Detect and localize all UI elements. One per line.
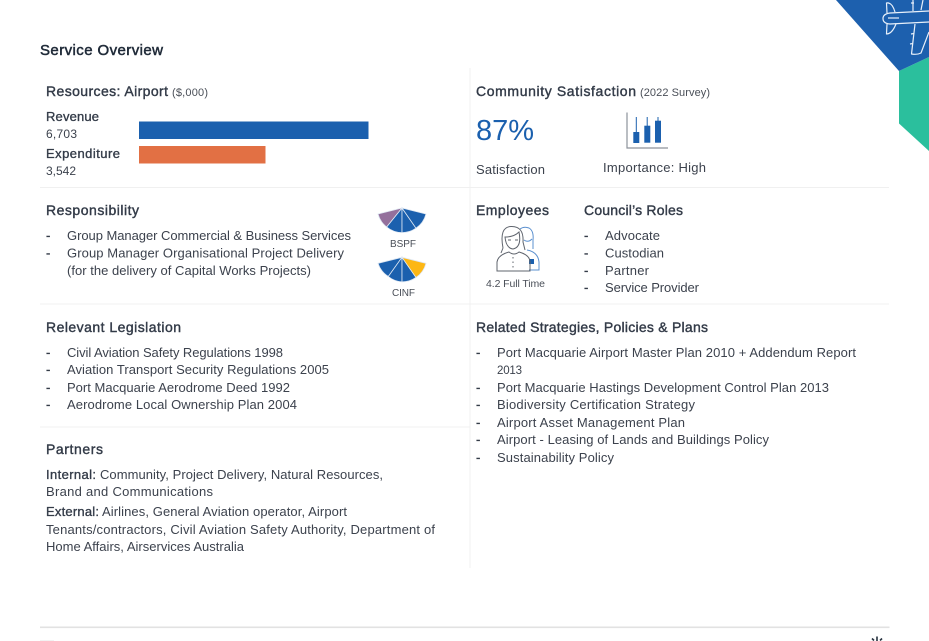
roles list [584,228,700,295]
responsibility list [46,228,352,278]
responsibility list: - [46,228,50,243]
responsibility list: Group Manager Organisational Project Delivery [67,246,344,260]
strategies list: Biodiversity Certification Strategy [497,397,696,412]
BSPF label: BSPF [390,239,416,250]
satisfaction label: Satisfaction [476,162,545,177]
strategies list: Airport - Leasing of Lands and Buildings Policy [497,432,770,447]
external partners [46,504,435,554]
heading: related strategies: Related Strategies, Policies & Plans [476,319,708,335]
strategies list: - [476,450,480,465]
heading: community satisfaction: Community Satisfaction [476,83,636,99]
heading: council's roles: Council’s Roles [584,202,683,218]
heading: relevant legislation: Relevant Legislation [46,319,181,335]
legislation list [46,345,329,412]
survey note: (2022 Survey) [640,87,710,99]
CINF label: CINF [392,288,415,299]
expenditure bar [139,146,266,164]
panel: resources [46,83,368,178]
internal partners: Internal: [46,467,96,482]
legislation list: - [46,345,50,360]
legislation list: Port Macquarie Aerodrome Deed 1992 [67,380,290,395]
legislation list: Aviation Transport Security Regulations 2005 [67,362,329,377]
strategies list: Airport Asset Management Plan [497,415,685,430]
roles list: - [584,280,588,295]
external partners: Tenants/contractors, Civil Aviation Safety Authority, Department of [46,522,435,537]
legislation list: Aerodrome Local Ownership Plan 2004 [67,397,297,412]
strategies list: Sustainability Policy [497,450,614,465]
responsibility list: - [46,246,50,260]
roles list: Service Provider [605,280,700,295]
unit note: ($,000) [172,87,208,99]
panel: relevant legislation [46,319,329,412]
external partners: External: [46,504,99,519]
corner decoration with airplane icon [836,0,929,151]
icon: importance chart [627,112,668,148]
responsibility list: Group Manager Commercial & Business Services [67,228,352,243]
strategies list: - [476,345,480,360]
icon: employees [497,226,539,271]
revenue bar [139,122,368,139]
roles list: - [584,246,588,260]
heading: employees: Employees [476,202,549,218]
heading: partners: Partners [46,441,103,457]
expenditure value: 3,542 [46,164,76,178]
employee count: 4.2 Full Time [486,278,545,290]
legislation list: Civil Aviation Safety Regulations 1998 [67,345,283,360]
icon: CINF fan [378,257,426,282]
responsibility list: (for the delivery of Capital Works Projects) [67,263,311,278]
panel: community satisfaction [476,83,710,177]
panel: employees [476,202,549,290]
internal partners: Community, Project Delivery, Natural Resources, [100,467,383,482]
legislation list: - [46,362,50,377]
strategies list: Port Macquarie Airport Master Plan 2010 + Addendum Report [497,345,856,360]
strategies list: - [476,415,480,430]
roles list: - [584,263,588,278]
strategies list: - [476,380,480,395]
roles list: Partner [605,263,650,278]
strategies list: - [476,432,480,447]
legislation list: - [46,380,50,395]
icon: footer logo [872,636,882,641]
strategies list: - [476,397,480,412]
importance label: Importance: High [603,160,706,175]
panel: council's roles [584,202,700,295]
panel: responsibility [46,202,426,299]
revenue label: Revenue [46,109,99,124]
title: Service Overview [40,42,163,59]
heading: responsibility: Responsibility [46,202,139,218]
internal partners: Brand and Communications [46,484,214,499]
strategies list: Port Macquarie Hastings Development Control Plan 2013 [497,380,829,395]
roles list: Advocate [605,228,660,243]
internal partners [46,467,383,499]
footer [40,626,890,641]
expenditure label: Expenditure [46,146,120,161]
strategies list: 2013 [497,365,522,377]
icon: BSPF fan [378,208,426,233]
external partners: Home Affairs, Airservices Australia [46,539,245,554]
heading: resources: Resources: Airport [46,83,168,99]
roles list: Custodian [605,246,664,260]
revenue value: 6,703 [46,127,77,141]
panel: partners [46,441,435,554]
external partners: Airlines, General Aviation operator, Airport [102,504,347,519]
legislation list: - [46,397,50,412]
panel: related strategies [476,319,856,465]
roles list: - [584,228,588,243]
strategies list [476,345,856,465]
satisfaction figure: 87% [476,115,534,147]
